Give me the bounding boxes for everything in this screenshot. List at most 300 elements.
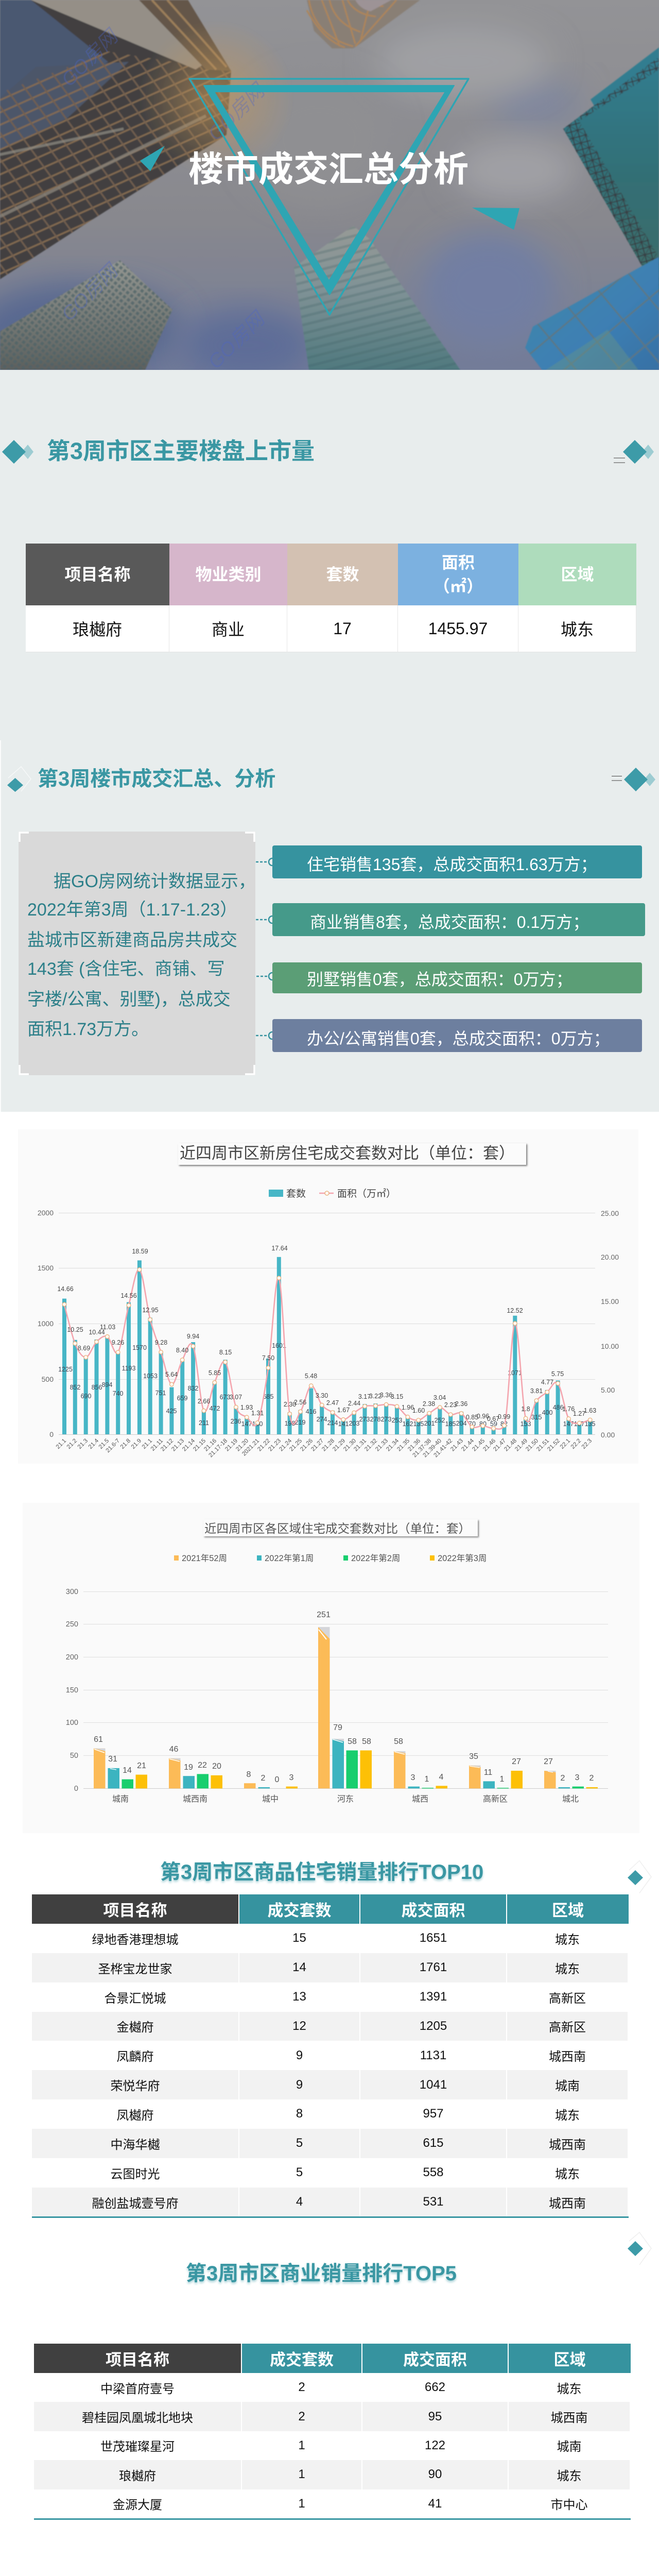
unit labels: 1225 [58, 1366, 73, 1373]
unit labels: 135 [585, 1420, 595, 1428]
table: residential top10: 凤麟府 [116, 2050, 153, 2064]
unit labels: 198 [285, 1420, 295, 1427]
table: residential top10: 项目名称 [103, 1902, 167, 1920]
unit labels: 100 [252, 1420, 263, 1428]
left axis [38, 1209, 54, 1438]
week axis labels: 21.52 [546, 1438, 561, 1452]
text panel: summary paragraph: 盐城市区新建商品房共成交 [27, 930, 237, 950]
table: residential top10: 15 [292, 1931, 306, 1945]
week axis labels: 21.37-38 [412, 1438, 432, 1459]
unit labels: 214 [327, 1419, 338, 1427]
table: commercial top5: 城西南 [551, 2411, 588, 2425]
table: commercial top5: 城东 [557, 2382, 582, 2396]
connectors between paragraph and stat bars [256, 857, 272, 1040]
text panel: summary paragraph: 143套 (含住宅、商铺、写 [27, 959, 224, 979]
y axis: 250 [66, 1620, 78, 1629]
area labels: 10.25 [67, 1326, 83, 1333]
value labels: 22 [198, 1761, 207, 1770]
table: residential top10: 城东 [555, 1933, 580, 1947]
area labels: 5.48 [305, 1372, 317, 1380]
table: commercial top5: 琅樾府 [119, 2469, 156, 2483]
watermarks: GO房网 [204, 79, 270, 145]
unit labels: 107 [574, 1420, 584, 1428]
left axis: 2000 [38, 1209, 54, 1217]
week axis labels: 21.3 [77, 1438, 89, 1450]
week axis labels: 21.30 [342, 1438, 357, 1452]
table: residential top10: 高新区 [549, 1992, 586, 2006]
icon: top10 diamond [628, 1860, 652, 1893]
area labels: 5.85 [209, 1369, 221, 1377]
table: residential top10: 合景汇悦城 [104, 1992, 166, 2006]
area labels: 5.75 [551, 1370, 564, 1378]
left edge strip [0, 740, 1, 1112]
stat bar: residential [272, 845, 642, 878]
table: commercial top5: 1 [298, 2467, 305, 2481]
value labels: 4 [439, 1773, 444, 1782]
table: residential top10: 5 [296, 2136, 303, 2150]
value labels: 3 [575, 1773, 580, 1782]
unit labels [58, 1342, 595, 1428]
district labels: 城中 [262, 1794, 279, 1804]
area labels: 1.67 [337, 1406, 350, 1414]
y axis: 150 [66, 1686, 78, 1694]
unit labels: 211 [199, 1419, 209, 1427]
panel: market supply and summary background [0, 370, 659, 1112]
table: residential top10: 融创盐城壹号府 [92, 2197, 178, 2211]
table: commercial top5: 碧桂园凤凰城北地块 [82, 2411, 193, 2425]
icon: right diamonds [614, 440, 654, 464]
week axis labels: 21.43 [449, 1438, 464, 1452]
area labels: 0.99 [498, 1413, 510, 1420]
stat bar: office: 办公/公寓销售0套，总成交面积：0万方； [307, 1029, 610, 1048]
table: residential top10: 区域 [552, 1902, 584, 1920]
heading: summary: 第3周楼市成交汇总、分析 [38, 768, 275, 790]
week axis labels: 21.44 [460, 1437, 476, 1452]
week axis labels: 21.48 [503, 1438, 518, 1452]
week axis labels: 21.49 [514, 1438, 529, 1452]
unit labels: 204 [456, 1420, 466, 1427]
value labels: 58 [348, 1737, 357, 1746]
right axis: 0.00 [601, 1431, 615, 1439]
week axis labels: 21.25 [288, 1438, 303, 1452]
table: residential top10 [32, 1894, 629, 2218]
unit labels: 751 [155, 1389, 166, 1397]
icon: left diamonds [2, 440, 33, 464]
unit labels: 82 [500, 1420, 508, 1428]
area labels: 2.66 [198, 1398, 210, 1405]
area labels: 1.31 [251, 1410, 264, 1417]
week axis labels: 21.13 [170, 1438, 185, 1452]
unit labels: 59 [490, 1420, 497, 1428]
week axis labels: 22.2 [570, 1438, 582, 1450]
area line [64, 1269, 590, 1429]
area labels: 9.26 [112, 1339, 124, 1346]
week axis labels: 21.9 [130, 1438, 143, 1450]
area labels: 3.81 [530, 1387, 543, 1395]
value labels: 2 [561, 1774, 565, 1783]
value labels: 20 [212, 1762, 221, 1771]
unit labels: 856 [92, 1384, 102, 1391]
area labels: 0.85 [466, 1414, 478, 1421]
left axis: 1000 [38, 1319, 54, 1328]
table: residential top10: 凤樾府 [116, 2109, 153, 2123]
table: residential top10: 12 [292, 2019, 306, 2033]
table: residential top10: 1041 [420, 2078, 447, 2092]
area labels: 9.28 [155, 1339, 167, 1346]
area labels: 1.60 [412, 1407, 425, 1414]
right axis: 15.00 [601, 1297, 619, 1306]
area labels: 17.64 [271, 1245, 288, 1252]
legend: 2022年第2周 [351, 1553, 400, 1563]
right axis: 5.00 [601, 1386, 615, 1394]
unit labels: 80 [479, 1420, 487, 1428]
week axis labels: 21.5 [98, 1438, 110, 1450]
table: residential top10: 云图时光 [110, 2167, 160, 2181]
unit bars [62, 1257, 592, 1434]
table: residential top10: 957 [423, 2107, 444, 2121]
week axis labels: 21.36 [407, 1438, 422, 1452]
watermarks: GO房网 [58, 25, 124, 91]
table: commercial top5: 项目名称 [106, 2351, 169, 2369]
lower right glass tower [525, 257, 659, 370]
value labels: 58 [362, 1737, 371, 1746]
unit labels: 236 [231, 1418, 241, 1425]
unit labels: 141 [338, 1420, 349, 1428]
unit labels: 690 [81, 1393, 91, 1400]
legend: 2022年第3周 [438, 1553, 487, 1563]
week axis labels: 21.39-40 [422, 1438, 443, 1459]
area labels: 3.15 [391, 1393, 403, 1400]
area labels: 3.17 [358, 1393, 371, 1400]
right axis: 25.00 [601, 1209, 619, 1217]
table: commercial top5: 金源大厦 [113, 2498, 162, 2512]
table: residential top10: 9 [296, 2078, 303, 2092]
district labels: 城西南 [183, 1794, 207, 1804]
table: residential top10: 城西南 [549, 2138, 586, 2152]
value labels: 1 [425, 1775, 429, 1784]
watermarks [58, 25, 270, 373]
sky background [0, 0, 659, 381]
text panel: summary paragraph: 据GO房网统计数据显示， [54, 872, 256, 891]
unit labels: 315 [531, 1414, 542, 1421]
text panel: summary paragraph [19, 832, 255, 1075]
table: residential top10: 615 [423, 2136, 444, 2150]
legend: 面积（万㎡） [337, 1188, 396, 1199]
left axis: 500 [42, 1375, 54, 1383]
week axis labels: 21.2 [66, 1438, 78, 1450]
table: residential top10: 中海华樾 [110, 2138, 160, 2152]
table: commercial top5: 城南 [557, 2440, 582, 2454]
area markers [62, 1267, 592, 1430]
table: commercial top5 [34, 2344, 631, 2520]
area labels: 2.47 [326, 1399, 339, 1406]
table: commercial top5: 1 [298, 2438, 305, 2452]
unit labels: 416 [306, 1408, 316, 1415]
value labels: 0 [275, 1775, 280, 1784]
y axis: 100 [66, 1719, 78, 1727]
bars: 2022 week 2 [122, 1751, 584, 1788]
area labels: 8.15 [219, 1349, 232, 1356]
value labels: 35 [469, 1752, 478, 1761]
unit labels: 147 [563, 1420, 574, 1428]
chart: district units, panel [23, 1503, 639, 1833]
unit labels: 70 [469, 1420, 476, 1428]
legend: 2022年第1周 [265, 1553, 314, 1563]
legend [174, 1553, 487, 1563]
stat bar: commercial [272, 903, 645, 936]
teal triangle frame [189, 79, 469, 315]
week axis labels: 21.24 [278, 1437, 293, 1452]
value labels: 58 [394, 1737, 403, 1746]
area labels: 14.56 [120, 1292, 137, 1299]
week axis labels: 21.28 [321, 1438, 336, 1452]
value labels: 3 [289, 1773, 294, 1782]
unit labels: 1193 [122, 1365, 135, 1372]
table: new supply [26, 544, 636, 652]
table: commercial top5: 41 [428, 2497, 442, 2511]
table: commercial top5: 662 [425, 2380, 445, 2394]
bars: 2022 week 3 [136, 1751, 598, 1788]
table: commercial top5: 区域 [554, 2351, 586, 2369]
area labels: 1.27 [573, 1410, 585, 1417]
lower left tower [0, 260, 172, 370]
area labels: 14.66 [57, 1285, 74, 1293]
legend [269, 1188, 396, 1199]
area labels: 3.30 [316, 1392, 328, 1399]
week axis labels: 21.34 [385, 1437, 401, 1452]
unit labels: 219 [295, 1419, 305, 1426]
value labels: 1 [500, 1775, 505, 1784]
value labels: 2 [261, 1774, 266, 1783]
legend: 2021年52周 [182, 1553, 227, 1563]
table: new supply: 商业 [212, 620, 245, 639]
week axis labels: 21.15 [192, 1438, 207, 1452]
unit labels: 185 [445, 1420, 456, 1428]
unit labels: 203 [349, 1420, 359, 1427]
table: commercial top5: 成交套数 [270, 2351, 334, 2369]
bars: 2021 week 52 [94, 1627, 556, 1788]
right axis [601, 1209, 619, 1439]
text panel: summary paragraph: 面积1.73万方。 [27, 1020, 149, 1039]
unit labels: 1053 [143, 1372, 158, 1380]
table: residential top10: 531 [423, 2195, 444, 2209]
small triangle left [140, 146, 165, 171]
stat bar: residential: 住宅销售135套，总成交面积1.63万方； [307, 855, 597, 874]
right axis: 20.00 [601, 1253, 619, 1261]
table: commercial top5: 中梁首府壹号 [100, 2382, 175, 2396]
district labels: 河东 [337, 1794, 354, 1804]
y axis: 0 [74, 1785, 78, 1793]
area labels: 2.38 [423, 1400, 435, 1408]
icon: summary right diamonds [612, 768, 655, 791]
unit labels: 1071 [508, 1369, 522, 1377]
table: residential top10: 8 [296, 2107, 303, 2121]
right axis: 10.00 [601, 1342, 619, 1350]
value labels [94, 1611, 594, 1784]
table: commercial top5: 世茂璀璨星河 [100, 2440, 175, 2454]
unit labels: 273 [381, 1416, 391, 1423]
area labels [57, 1245, 596, 1422]
chart: weekly units and area, panel [18, 1129, 638, 1464]
week axis labels: 21.32 [363, 1438, 378, 1452]
table: residential top10: 4 [296, 2195, 303, 2209]
value labels: 31 [108, 1755, 117, 1764]
unit labels: 852 [70, 1384, 80, 1391]
small triangle right [472, 208, 519, 230]
y axis: 200 [66, 1653, 78, 1662]
table: residential top10: 9 [296, 2048, 303, 2062]
unit labels: 1570 [132, 1344, 147, 1351]
area labels: 3.07 [230, 1394, 242, 1401]
centre bottom tower [294, 226, 460, 370]
unit labels: 147 [241, 1420, 252, 1428]
table: new supply: 物业类别 [195, 565, 262, 584]
week axis labels: 21.4 [88, 1437, 100, 1450]
week axis labels: 21.14 [181, 1437, 197, 1452]
district labels: 高新区 [483, 1794, 508, 1804]
text panel: summary paragraph: 2022年第3周（1.17-1.23） [27, 900, 237, 920]
y axis: 300 [66, 1588, 78, 1596]
unit labels: 832 [188, 1385, 198, 1392]
area labels: 2.56 [294, 1399, 306, 1406]
unit labels: 162 [403, 1420, 413, 1428]
week axis labels: 21.27 [310, 1438, 325, 1452]
main title: 楼市成交汇总分析 [188, 150, 469, 189]
unit labels: 252 [435, 1417, 445, 1424]
table: residential top10: 成交套数 [268, 1902, 332, 1920]
area labels: 2.44 [348, 1400, 360, 1407]
unit labels: 253 [392, 1417, 402, 1424]
district labels [112, 1794, 579, 1804]
grouped bar chart by district [66, 1553, 608, 1804]
unit labels: 472 [210, 1405, 220, 1412]
unit labels: 400 [542, 1409, 552, 1416]
table: residential top10: 5 [296, 2165, 303, 2179]
stat bar: villa: 别墅销售0套，总成交面积：0万方； [307, 970, 573, 989]
week axis labels: 21.12 [160, 1438, 175, 1452]
table: new supply: （㎡） [433, 577, 483, 596]
table: residential top10: 1131 [420, 2048, 446, 2062]
week axis labels: 21.33 [374, 1438, 389, 1452]
week axis labels: 21.47 [492, 1438, 507, 1452]
table: new supply: 1455.97 [428, 619, 488, 638]
area labels: 18.59 [132, 1248, 148, 1255]
table: residential top10: 1205 [420, 2019, 447, 2033]
icon: summary left diamond [7, 766, 31, 792]
text panel: summary paragraph: 字楼/公寓、别墅)，总成交 [27, 990, 231, 1009]
week axis labels: 21.41-42 [433, 1438, 454, 1459]
value labels: 2 [589, 1774, 594, 1783]
right lattice tower [563, 47, 659, 296]
area labels: 1.8 [521, 1405, 530, 1413]
area labels: 1.96 [402, 1404, 414, 1411]
area labels: 12.95 [142, 1307, 159, 1314]
week axis labels: 22.3 [581, 1438, 593, 1450]
area labels: 4.77 [541, 1379, 553, 1386]
week axis labels: 21.20 [235, 1438, 250, 1452]
unit labels: 273 [359, 1416, 370, 1423]
table: residential top10: 圣桦宝龙世家 [98, 1962, 172, 1976]
table: new supply: 面积 [442, 553, 475, 572]
table: new supply: 17 [333, 619, 352, 638]
table: residential top10: 绿地香港理想城 [92, 1933, 178, 1947]
area labels: 2.30 [284, 1401, 296, 1408]
week axis labels: 21.1 [141, 1438, 153, 1450]
unit labels: 673 [220, 1394, 230, 1401]
y axis [66, 1588, 78, 1793]
unit labels: 201 [424, 1420, 435, 1427]
area labels: 2.36 [455, 1400, 467, 1408]
table: residential top10: 1761 [420, 1960, 447, 1974]
week axis labels: 21.8 [119, 1438, 132, 1450]
heading: top10: 第3周市区商品住宅销量排行TOP10 [160, 1861, 483, 1884]
unit labels: 685 [263, 1393, 273, 1400]
unit labels: 1601 [272, 1342, 286, 1349]
value labels: 61 [94, 1735, 103, 1744]
unit labels: 740 [113, 1390, 123, 1397]
area labels: 8.69 [78, 1345, 90, 1352]
table: commercial top5: 95 [428, 2410, 442, 2424]
table: residential top10: 高新区 [549, 2021, 586, 2035]
table: new supply: 琅樾府 [73, 620, 122, 639]
week axis labels: 21.35 [396, 1438, 411, 1452]
district labels: 城西 [412, 1794, 428, 1804]
unit labels: 153 [521, 1420, 531, 1428]
bars: 2022 week 1 [108, 1739, 570, 1788]
curled bar corners [94, 1627, 556, 1772]
table: commercial top5: 90 [428, 2467, 442, 2481]
value labels: 251 [317, 1611, 331, 1619]
area labels: 0.96 [477, 1413, 489, 1420]
table: residential top10: 城东 [555, 2109, 580, 2123]
table: residential top10: 1651 [420, 1931, 447, 1945]
top dome building [307, 0, 420, 48]
table: residential top10: 14 [292, 1960, 306, 1974]
chart title: weekly: 近四周市区新房住宅成交套数对比（单位：套） [180, 1144, 515, 1162]
table: residential top10: 成交面积 [402, 1902, 465, 1920]
left axis: 0 [49, 1430, 54, 1438]
table: commercial top5: 122 [425, 2438, 445, 2452]
left tower [0, 0, 293, 279]
unit labels: 274 [317, 1416, 327, 1423]
stat bar: office [272, 1019, 642, 1052]
hero banner: skyline photo with title [0, 0, 659, 370]
heading: supply: 第3周市区主要楼盘上市量 [47, 438, 315, 464]
district labels: 城北 [562, 1794, 579, 1804]
week axis labels: 21.50 [525, 1438, 540, 1452]
week axis labels: 21.1 [55, 1438, 67, 1450]
value labels: 11 [484, 1768, 492, 1777]
table: residential top10: 荣悦华府 [110, 2079, 160, 2093]
table: commercial top5: 城东 [557, 2469, 582, 2483]
value labels: 14 [123, 1766, 132, 1775]
week axis labels: 21.26 [299, 1438, 314, 1452]
value labels: 21 [137, 1761, 146, 1770]
week axis labels: 21.6-7 [105, 1438, 121, 1454]
area labels: 12.52 [507, 1307, 523, 1314]
unit labels: 486 [553, 1404, 563, 1411]
stat bar: commercial: 商业销售8套，总成交面积：0.1万方； [310, 913, 589, 931]
table: residential top10: 城南 [555, 2079, 580, 2093]
week axis labels [55, 1437, 593, 1459]
y axis: 50 [70, 1752, 78, 1760]
unit labels: 894 [102, 1381, 112, 1388]
value labels: 27 [544, 1757, 553, 1766]
table: commercial top5: 1 [298, 2497, 305, 2511]
unit labels: 659 [177, 1395, 187, 1402]
table: residential top10: 13 [292, 1990, 306, 2004]
area labels: 11.03 [100, 1324, 115, 1331]
